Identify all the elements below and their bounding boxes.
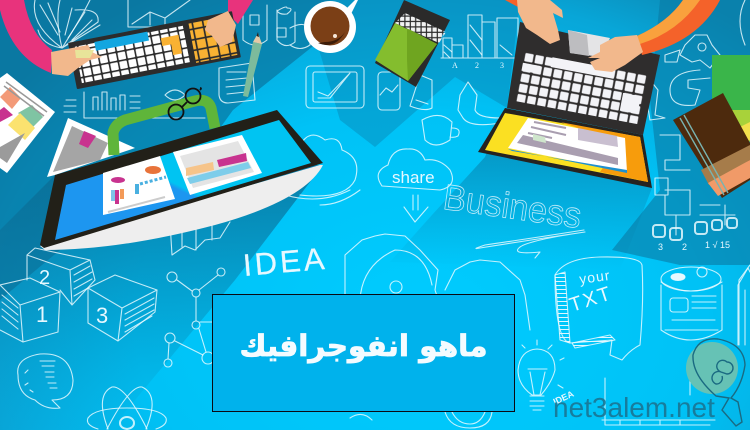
laptop screen frame [478, 108, 652, 188]
sketch: speech bubble list [18, 354, 73, 408]
tablet base [40, 165, 323, 250]
sketch: top-right puzzle gear [640, 0, 745, 120]
green handle [113, 100, 215, 155]
green book [712, 55, 750, 140]
sketch: lightbulb: IDEA [552, 388, 576, 407]
document sheet middle [47, 118, 135, 177]
text: IDEA: IDEA [242, 241, 329, 283]
text: cube numbers: 3 [96, 303, 108, 328]
smartphone [375, 0, 450, 87]
pink arm left [0, 0, 253, 73]
title box [212, 294, 515, 412]
stacked books [673, 55, 750, 198]
text: cube numbers: 1 [36, 302, 48, 327]
text: Business: Business [441, 177, 584, 236]
sketch: notebook [219, 63, 255, 103]
phone screen [375, 23, 437, 81]
chart card [103, 156, 175, 215]
upper hand [517, 0, 563, 44]
laptop deck [507, 22, 660, 135]
sketch: flowchart: 1 √ 15 [705, 240, 730, 250]
text: cube numbers [36, 267, 108, 328]
document sheet left [0, 73, 55, 173]
text: cube numbers: 2 [39, 267, 50, 289]
brown notebook [673, 93, 750, 198]
sketch: atom [87, 387, 166, 429]
pencil [243, 32, 262, 97]
laptop touchpad [568, 30, 610, 57]
tablet device [40, 110, 323, 250]
sketch: arrow up [458, 82, 500, 125]
keyboard: black with orange keys [68, 11, 241, 89]
sketch: top-right bar chart: A [452, 61, 458, 70]
keyboard white keys [75, 26, 190, 83]
laptop keys [516, 52, 648, 124]
laptop yellow screen [485, 113, 648, 182]
title box: ماهو انفوجرافيك [239, 329, 488, 363]
laptop document [508, 118, 627, 172]
sketch: tin can [661, 267, 722, 340]
layout card [173, 135, 262, 195]
sketch: right edge box [739, 265, 750, 345]
hands on keyboard [51, 11, 236, 76]
sketch: flowchart: 2 [682, 242, 687, 252]
sketch: flowchart [653, 135, 737, 252]
laptop [478, 22, 660, 188]
phone keys [395, 13, 446, 43]
small sleeve [505, 0, 521, 7]
text: share: share [392, 168, 435, 187]
sketch: top-right bar chart [441, 15, 518, 70]
sketch: line graph [128, 0, 205, 27]
sketch: gears [345, 234, 530, 350]
sketch: swoosh underline [476, 230, 585, 258]
orange arm [637, 0, 720, 55]
sketch: folded tags [170, 222, 230, 255]
sketch: leaf fan top left [34, 0, 100, 48]
sketch: cloud measuring tape [285, 135, 360, 205]
sketch: your TXT speech bubble [555, 257, 643, 360]
coffee cup [304, 0, 358, 53]
sketch: pencil at right edge [738, 268, 750, 345]
lower hand [588, 35, 643, 72]
sketch: share cloud [378, 149, 452, 222]
sketch: smartphones [378, 72, 432, 110]
tablet screen [55, 120, 311, 240]
hands and orange arm on laptop [505, 0, 720, 72]
keyboard blue key bar [94, 32, 149, 51]
logo text: net3alem.net: net3alem.net [553, 392, 715, 423]
sketch: your TXT speech bubble: your [578, 267, 611, 287]
sketch: top-right bar chart: 3 [500, 61, 504, 70]
sketch: bar chart under keyboard [64, 90, 205, 118]
sketch: network [164, 268, 225, 367]
sketch: top-right bar chart: 2 [475, 61, 479, 70]
sketch: numbered cubes [0, 248, 157, 342]
sketch: coffee mug [422, 115, 459, 145]
sketch: jars [243, 0, 310, 48]
sketch: flowchart: 3 [658, 242, 663, 252]
eyeglasses [168, 88, 201, 120]
keyboard orange key block [189, 16, 237, 63]
sketch: bottom gear and axes [350, 365, 715, 428]
sketch: lightbulb [508, 340, 576, 410]
logo icon: bulb [686, 339, 745, 426]
tablet frame [40, 110, 323, 248]
keyboard orange enter key [161, 35, 182, 57]
sketch: tablet with check [306, 66, 364, 108]
sketch: your TXT speech bubble: TXT [567, 282, 615, 317]
